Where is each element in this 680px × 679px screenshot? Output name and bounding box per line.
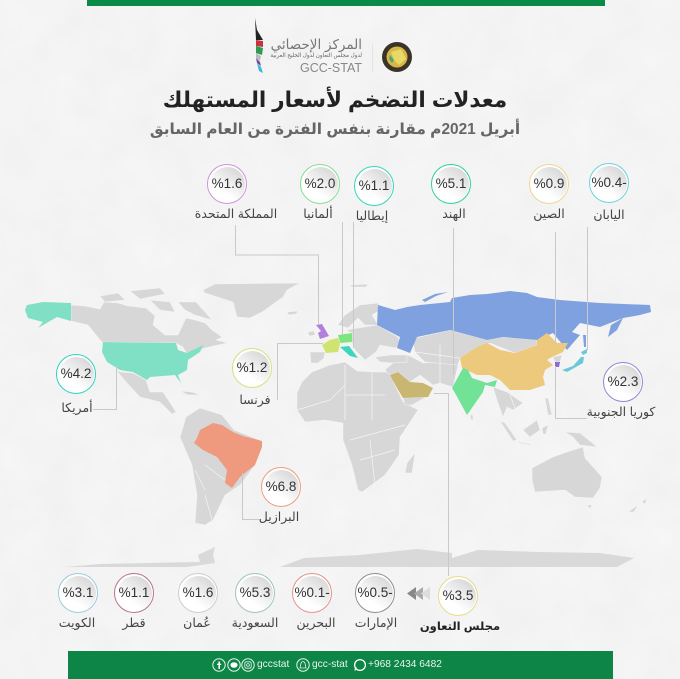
leader: USA	[93, 365, 116, 410]
country: UK	[316, 324, 329, 339]
country: Russia	[377, 291, 651, 353]
social icons	[212, 658, 366, 672]
badge: Qatar: %1.1	[119, 584, 149, 600]
badge: Kuwait: الكويت	[59, 616, 95, 630]
badge: United Kingdom: المملكة المتحدة	[195, 207, 277, 221]
badge: USA: أمريكا	[61, 401, 93, 415]
icon: twitter	[228, 659, 240, 671]
badge: South Korea	[587, 362, 656, 419]
badge: Saudi Arabia: %5.3	[240, 584, 270, 600]
badge: Brazil: البرازيل	[259, 510, 299, 524]
badge: Bahrain: %0.1-	[294, 584, 330, 600]
badge: China: %0.9	[534, 176, 564, 190]
badge: Japan: اليابان	[593, 208, 625, 222]
badge: India: %5.1	[436, 176, 466, 190]
country: USA mainland	[102, 342, 203, 383]
country: France	[322, 338, 340, 353]
badge: France: فرنسا	[239, 393, 271, 407]
badge: Oman	[178, 573, 218, 630]
leader: Brazil	[242, 473, 260, 520]
badge: Qatar	[114, 573, 154, 630]
top green bar	[87, 0, 605, 6]
icon: facebook	[213, 659, 225, 671]
title: معدلات التضخم لأسعار المستهلك	[163, 88, 507, 112]
badge: India: الهند	[442, 207, 466, 221]
leader: GCC	[434, 394, 448, 576]
Russia: Novaya Zemlya	[422, 292, 448, 302]
badge: UAE	[355, 573, 397, 630]
Russia: Kamchatka	[608, 318, 623, 337]
badge: Kuwait: %3.1	[63, 584, 93, 600]
badge: South Korea: %2.3	[608, 374, 638, 388]
badge: China: الصين	[533, 207, 565, 221]
leader: South Korea	[556, 366, 587, 418]
badge: France	[232, 348, 272, 407]
badge: GCC	[420, 576, 500, 633]
country borders	[130, 345, 515, 520]
logo: GCC-STAT	[255, 18, 412, 75]
icon: whatsapp	[355, 660, 365, 670]
country: Japan	[562, 349, 587, 372]
leader: Japan	[586, 227, 588, 350]
badge: Bahrain: البحرين	[296, 616, 336, 630]
logo Arabic name: المركز الإحصائي	[271, 37, 362, 52]
badge: United Kingdom: %1.6	[212, 176, 242, 190]
badge: Qatar: قطر	[122, 616, 146, 630]
badge: Japan: %0.4-	[592, 174, 627, 190]
country: South Korea	[555, 362, 560, 367]
badge: USA	[56, 354, 96, 415]
badge: Italy	[354, 166, 394, 224]
leader: India	[452, 228, 454, 375]
leader: Germany	[342, 222, 344, 335]
badge: Germany: %2.0	[305, 176, 335, 190]
badge: Saudi Arabia	[232, 573, 278, 630]
country: China	[460, 333, 568, 390]
country: Germany	[338, 333, 352, 343]
arrows toward GCC	[407, 587, 430, 600]
footer bar	[68, 651, 613, 679]
badge: Oman: %1.6	[183, 584, 213, 600]
badge: USA: %4.2	[61, 366, 91, 380]
badge: UAE: %0.5-	[358, 584, 393, 600]
icon: snapchat	[297, 659, 309, 671]
badge: South Korea: كوريا الجنوبية	[587, 405, 655, 419]
icon: striped ribbon	[255, 18, 263, 73]
subtitle: أبريل 2021م مقارنة بنفس الفترة من العام السابق	[150, 121, 520, 138]
badge: Saudi Arabia: السعودية	[232, 616, 278, 630]
icon: instagram	[242, 659, 254, 671]
Russia: Sakhalin	[583, 335, 586, 347]
footer: phone number: +968 2434 6482	[368, 659, 442, 670]
country: Brazil	[194, 423, 262, 488]
country: Italy	[340, 346, 358, 358]
logo divider	[372, 44, 373, 72]
country: Alaska (USA)	[25, 302, 71, 328]
badge: France: %1.2	[237, 360, 267, 374]
badge: Bahrain	[292, 573, 336, 630]
leader: China	[554, 232, 556, 345]
Antarctica	[65, 547, 634, 567]
badge: Oman: عُمان	[183, 616, 211, 630]
badge: Germany: ألمانيا	[303, 207, 333, 221]
badge: Italy: %1.1	[359, 178, 389, 192]
leader: UK	[236, 225, 318, 325]
country: Saudi GCC	[390, 372, 433, 398]
badge: Germany	[300, 164, 340, 221]
badge: Brazil	[259, 467, 301, 524]
badge: India	[431, 164, 471, 221]
footer: gcc-stat handle: gcc-stat	[312, 659, 348, 670]
badge: Kuwait	[58, 573, 98, 630]
country: India	[452, 368, 497, 415]
icon: GCC emblem	[382, 42, 412, 72]
logo GCC-STAT text: GCC-STAT	[300, 61, 362, 75]
badge: Italy: إيطاليا	[356, 209, 388, 223]
badge: GCC: مجلس التعاون	[420, 621, 500, 633]
badge: Japan	[589, 163, 629, 222]
badge: United Kingdom	[195, 164, 277, 221]
logo Arabic subtitle: لدول مجلس التعاون لدول الخليج العربية	[270, 53, 362, 59]
badge: China	[529, 164, 569, 221]
badge: UAE: الإمارات	[355, 616, 397, 630]
badge: GCC: %3.5	[443, 588, 473, 602]
leader lines	[93, 222, 588, 576]
leader: Italy	[352, 222, 354, 348]
footer: gccstat handle: gccstat	[257, 659, 289, 670]
leader: France	[278, 344, 323, 400]
gray land masses	[71, 283, 647, 525]
badge: Brazil: %6.8	[266, 478, 296, 494]
